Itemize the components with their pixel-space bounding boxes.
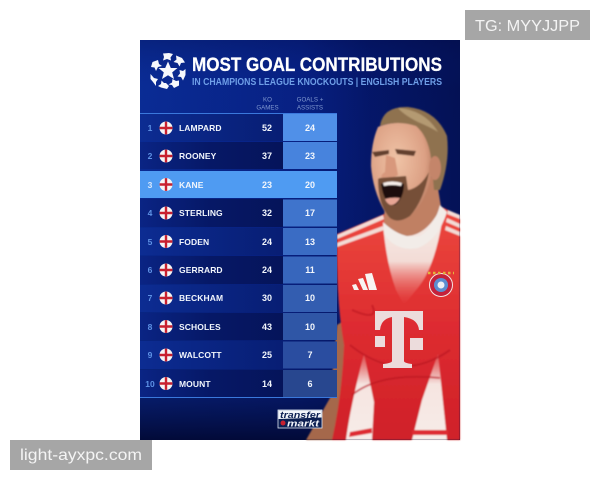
- row 5: Foden: 13: [305, 237, 315, 247]
- row 2: Rooney: 37: [262, 151, 272, 161]
- club crest: [428, 273, 454, 296]
- watermark: TG: [465, 10, 590, 40]
- neck: [384, 176, 441, 236]
- row 4: Sterling: 32: [262, 208, 272, 218]
- side stripes: [346, 354, 374, 440]
- infographic background panel: [140, 40, 460, 440]
- row 10: Mount: [140, 370, 337, 397]
- row 6: Gerrard: GERRARD: [179, 265, 223, 275]
- row 7: Beckham: 7: [148, 293, 153, 303]
- head: [371, 123, 432, 221]
- adidas stripes: [352, 273, 377, 290]
- row 9: Walcott: 7: [307, 350, 313, 360]
- row 3: Kane highlighted: 3: [148, 180, 153, 190]
- row 4: Sterling: STERLING: [179, 208, 223, 218]
- row 1: Lampard: 52: [262, 123, 272, 133]
- row 8: Scholes: 8: [148, 322, 153, 332]
- row 2: Rooney: ROONEY: [179, 151, 217, 161]
- row 10: Mount: 6: [307, 379, 313, 389]
- Transfermarkt logo: transfer: [280, 410, 321, 420]
- row 3: Kane highlighted: [140, 171, 337, 198]
- shoulder stripes left: [337, 215, 384, 247]
- column header: KO games: GAMES: [256, 104, 279, 112]
- subtitle: IN CHAMPIONS LEAGUE KNOCKOUTS | ENGLISH PLAYERS: [192, 77, 442, 88]
- table rule top: [140, 113, 337, 114]
- row 5: Foden: 5: [148, 237, 153, 247]
- row 9: Walcott: [140, 341, 337, 369]
- row 8: Scholes: 43: [262, 322, 272, 332]
- row 3: Kane highlighted: 23: [262, 180, 272, 190]
- table rule bottom: [140, 397, 337, 398]
- row 10: Mount: 14: [262, 379, 272, 389]
- ranking table: [140, 114, 337, 397]
- row 5: Foden: [140, 228, 337, 255]
- row 10: Mount: MOUNT: [179, 379, 211, 389]
- row 2: Rooney: 23: [305, 151, 315, 161]
- row 1: Lampard: LAMPARD: [179, 123, 222, 133]
- row 7: Beckham: 10: [305, 293, 315, 303]
- title: MOST GOAL CONTRIBUTIONS: [192, 55, 442, 76]
- column header: goals and assists: ASSISTS: [297, 104, 323, 112]
- Transfermarkt logo: [278, 410, 322, 428]
- row 5: Foden: FODEN: [179, 237, 209, 247]
- row 7: Beckham: [140, 285, 337, 312]
- row 8: Scholes: 10: [305, 322, 315, 332]
- row 4: Sterling: [140, 199, 337, 227]
- watermark: site: light-ayxpc.com: [20, 447, 142, 464]
- jersey: [332, 205, 460, 440]
- row 1: Lampard: 24: [305, 123, 315, 133]
- white chest: [383, 208, 442, 305]
- row 7: Beckham: BECKHAM: [179, 293, 223, 303]
- beard: [378, 172, 429, 221]
- row 8: Scholes: SCHOLES: [179, 322, 221, 332]
- row 1: Lampard: 1: [148, 123, 153, 133]
- watermark: site: [10, 440, 152, 470]
- ear: [429, 156, 441, 180]
- row 7: Beckham: 30: [262, 293, 272, 303]
- column header: goals and assists: GOALS +: [297, 96, 323, 104]
- column header: KO games: KO: [263, 96, 272, 104]
- mouth: [381, 182, 404, 205]
- T sponsor logo: [375, 311, 423, 368]
- nose shadow: [381, 155, 398, 178]
- eyes and brows: [372, 149, 416, 157]
- fold shadows: [350, 305, 450, 395]
- icon: Champions League starball: [150, 53, 186, 89]
- collar: [383, 205, 447, 249]
- row 8: Scholes: [140, 313, 337, 340]
- row 10: Mount: 10: [145, 379, 155, 389]
- row 4: Sterling: 4: [148, 208, 153, 218]
- arm: [306, 320, 350, 440]
- player photo: Harry Kane: [306, 107, 460, 440]
- row 5: Foden: 24: [262, 237, 272, 247]
- Transfermarkt logo: markt: [287, 418, 320, 428]
- row 9: Walcott: WALCOTT: [179, 350, 222, 360]
- row 1: Lampard: [140, 114, 337, 141]
- row 6: Gerrard: [140, 256, 337, 284]
- row 6: Gerrard: 11: [305, 265, 315, 275]
- row 6: Gerrard: 6: [148, 265, 153, 275]
- row 2: Rooney: 2: [148, 151, 153, 161]
- row 3: Kane highlighted: 20: [305, 180, 315, 190]
- row 9: Walcott: 9: [148, 350, 153, 360]
- row 3: Kane highlighted: KANE: [179, 180, 204, 190]
- watermark: TG: TG: MYYJJPP: [475, 18, 580, 35]
- row 9: Walcott: 25: [262, 350, 272, 360]
- shoulder stripes right: [445, 210, 460, 236]
- row 6: Gerrard: 24: [262, 265, 272, 275]
- row 4: Sterling: 17: [305, 208, 315, 218]
- hair: [380, 107, 448, 190]
- row 2: Rooney: [140, 142, 337, 169]
